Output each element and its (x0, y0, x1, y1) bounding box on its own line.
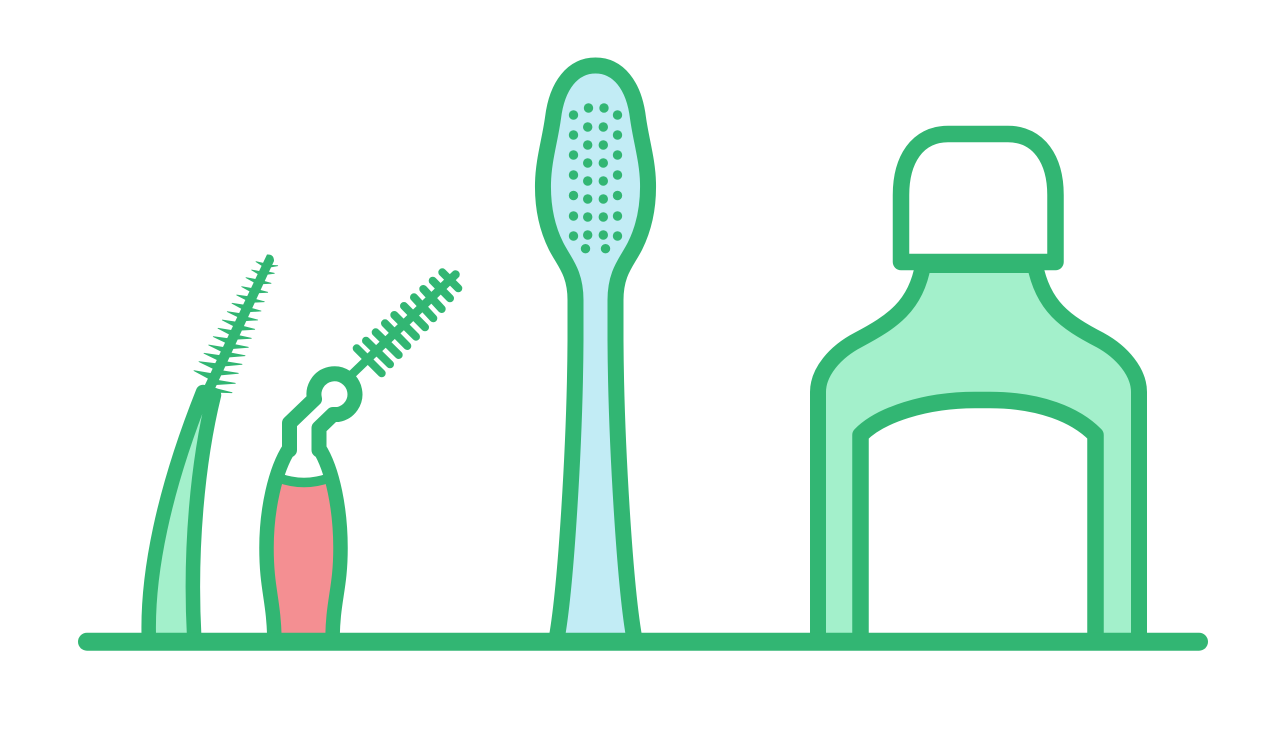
bottle cap (901, 134, 1056, 262)
brush handle outline (266, 448, 340, 642)
brush neck and ring (290, 374, 355, 450)
icon: interdental brush (266, 272, 458, 642)
icon: mouthwash bottle (818, 134, 1139, 642)
pick bristles (194, 254, 278, 394)
brush collar (278, 445, 330, 482)
pick body (149, 392, 214, 642)
bottle body (818, 265, 1139, 642)
toothbrush bristle dots (569, 103, 622, 253)
brush bristles (345, 272, 458, 381)
icon: soft pick with bristles (149, 254, 278, 642)
brush handle colour (266, 448, 340, 642)
icon: toothbrush head (543, 66, 648, 642)
toothbrush body (543, 66, 648, 642)
collar divider (279, 478, 329, 482)
bottle label (860, 400, 1096, 642)
shelf line (87, 633, 1199, 651)
